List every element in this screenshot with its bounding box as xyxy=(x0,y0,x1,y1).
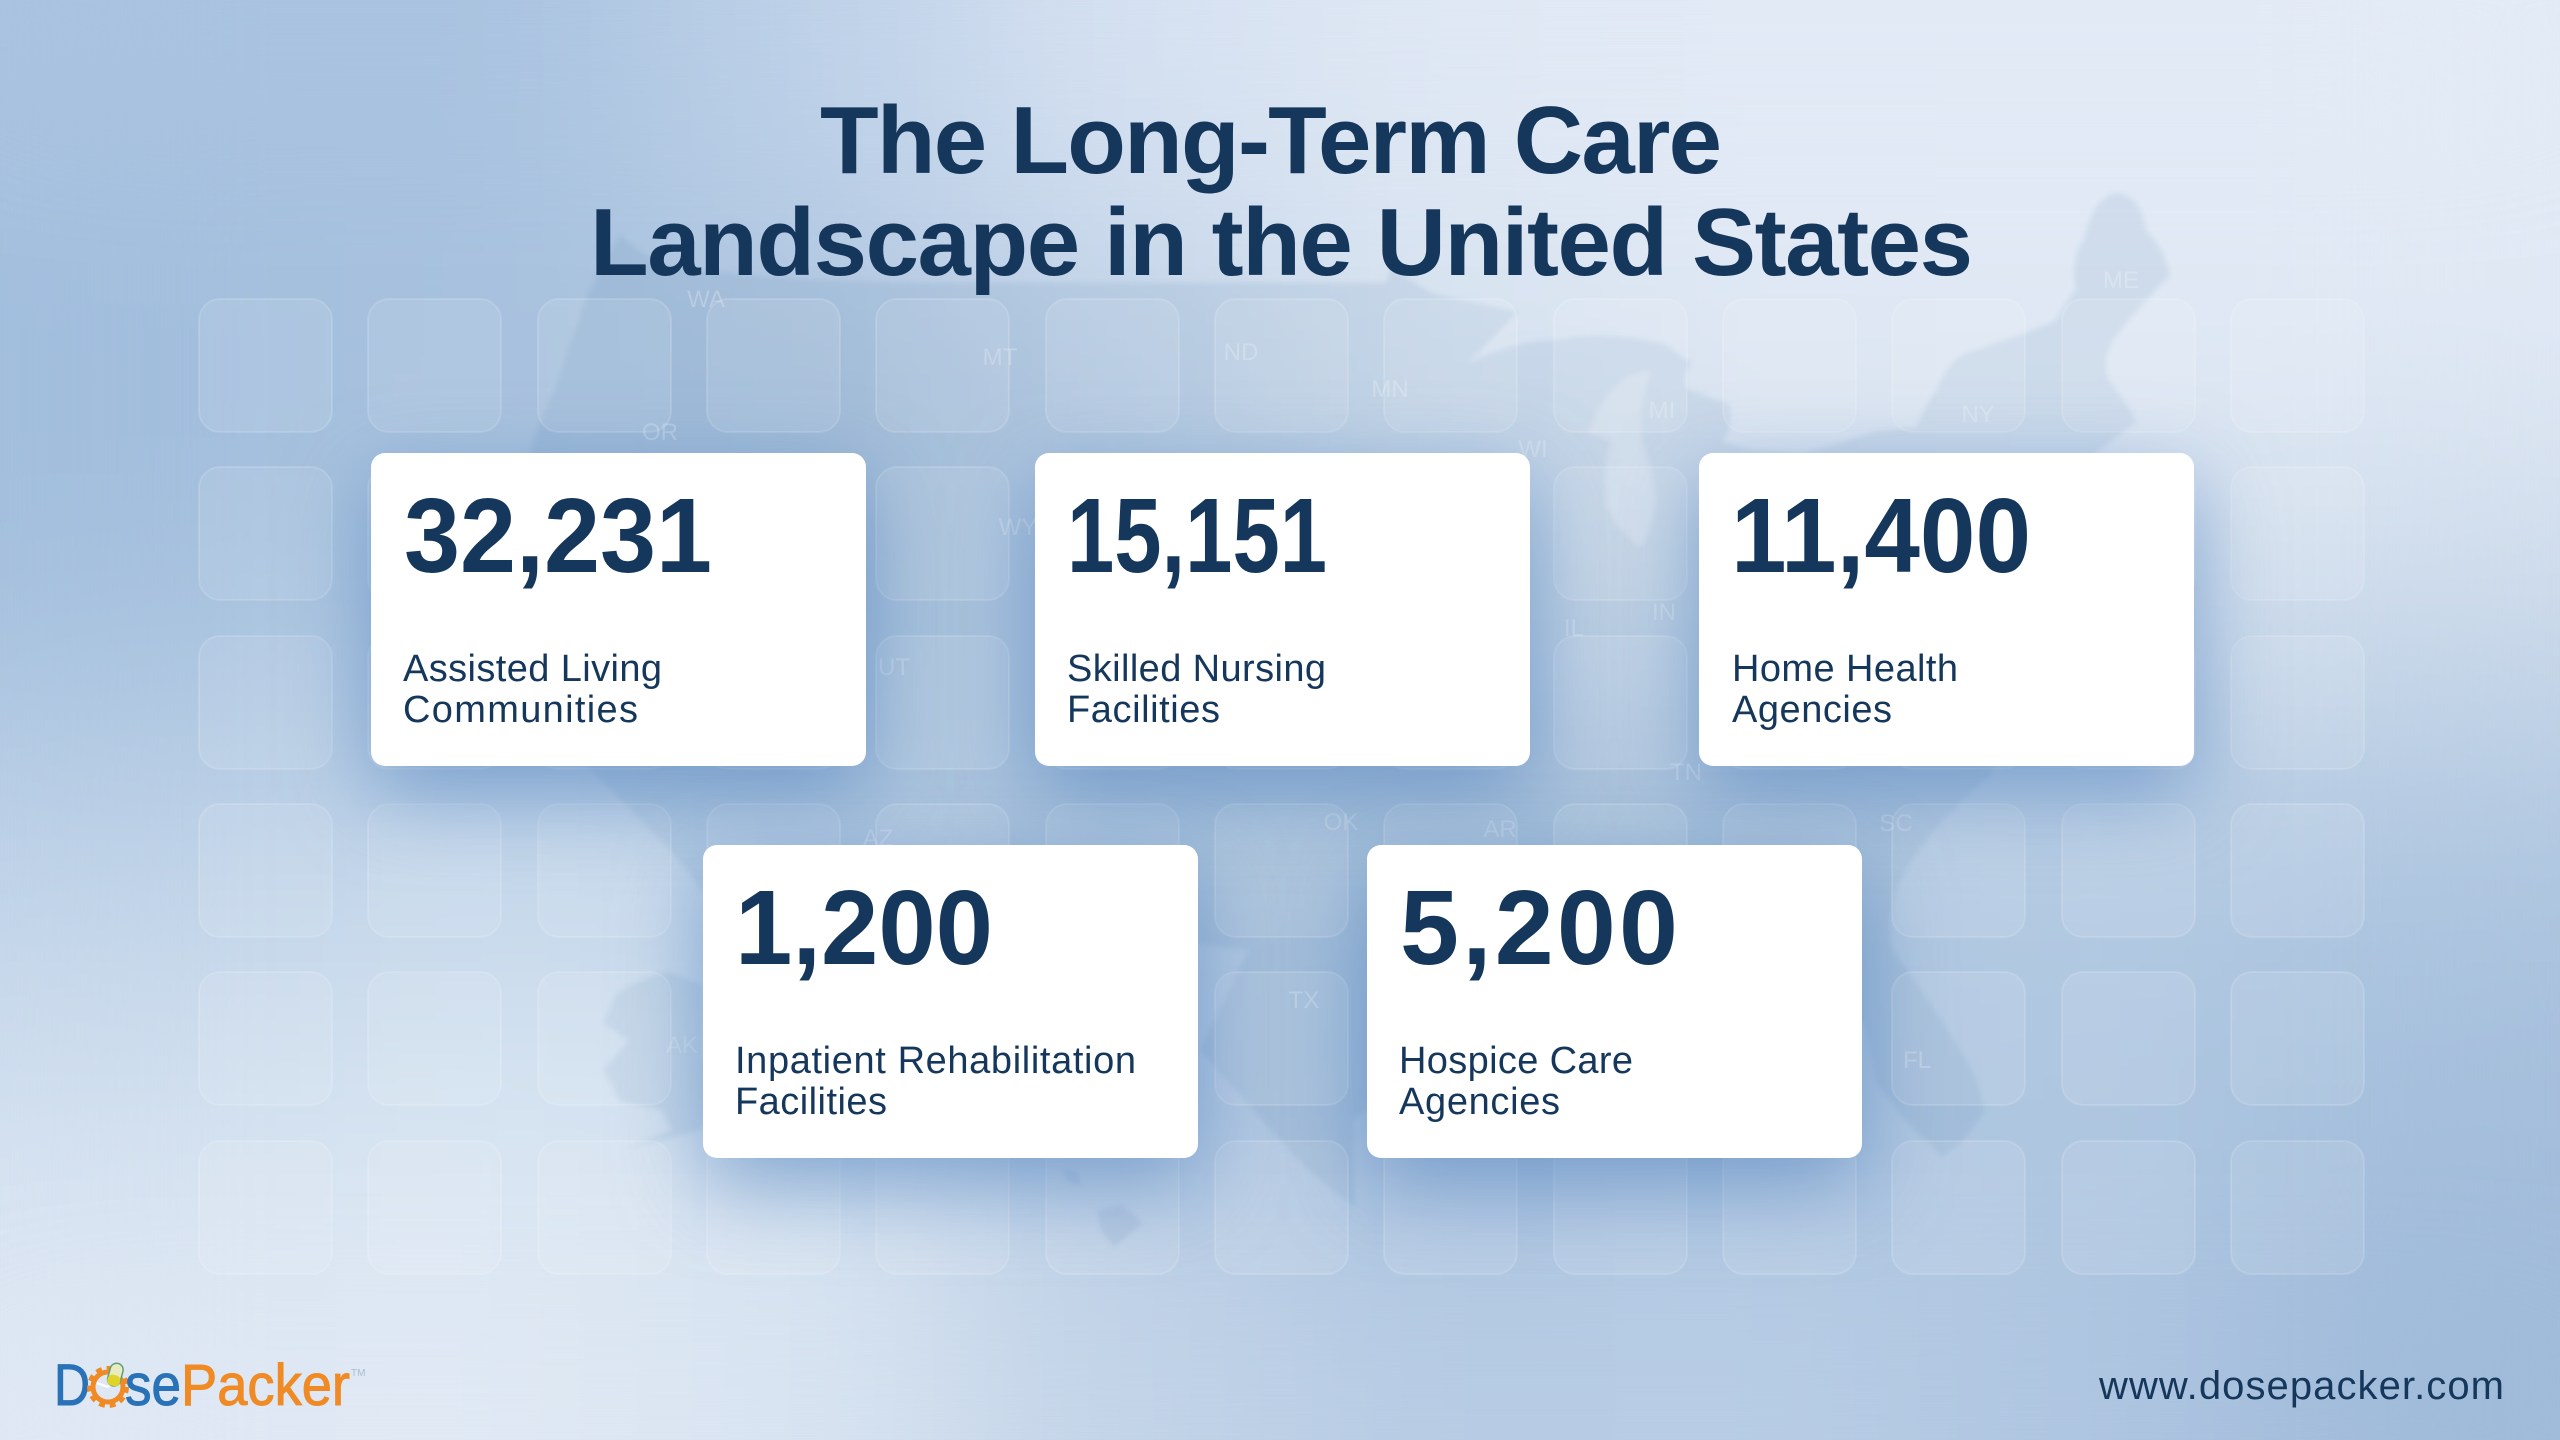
card: skilled nursing facilities: Facilities xyxy=(1067,689,1220,731)
card: home health agencies: Agencies xyxy=(1732,689,1892,731)
map: state abbreviations: ME xyxy=(2103,267,2139,294)
card: hospice care agencies: Hospice Care xyxy=(1399,1040,1633,1082)
icon: orange gear with capsule xyxy=(89,1362,127,1406)
card: inpatient rehabilitation facilities xyxy=(703,845,1198,1158)
map: state abbreviations: WA xyxy=(687,286,725,313)
map: state abbreviations: WI xyxy=(1518,436,1548,463)
map: state abbreviations: IN xyxy=(1652,599,1676,626)
background tile grid xyxy=(199,299,2364,1274)
map: Lake Michigan xyxy=(1590,372,1655,546)
map: state abbreviations: TN xyxy=(1670,759,1702,786)
map: state abbreviations: ND xyxy=(1224,339,1258,366)
map: state abbreviations: OR xyxy=(642,419,678,446)
map: state abbreviations: UT xyxy=(878,654,910,681)
map: state abbreviations: SC xyxy=(1879,810,1913,837)
logo: DosePacker xyxy=(54,1353,365,1418)
card: hospice care agencies: 5,200 xyxy=(1400,869,1678,987)
card: inpatient rehabilitation facilities: Facilities xyxy=(735,1081,887,1123)
map: state abbreviations: AZ xyxy=(863,825,893,852)
card: assisted living communities: 32,231 xyxy=(404,477,712,595)
logo: DosePacker: se xyxy=(125,1353,181,1418)
card: skilled nursing facilities: 15,151 xyxy=(1067,477,1327,595)
card: skilled nursing facilities: Skilled Nursing xyxy=(1067,648,1326,690)
map: state abbreviations: MN xyxy=(1371,376,1409,403)
card: skilled nursing facilities xyxy=(1035,453,1530,766)
logo: DosePacker: D xyxy=(54,1353,90,1418)
map: state abbreviations: AK xyxy=(666,1032,698,1059)
map: state abbreviations: AR xyxy=(1483,816,1517,843)
title: The Long-Term Care xyxy=(820,87,1722,194)
map: state abbreviations: OK xyxy=(1324,809,1358,836)
website url: www.dosepacker.com xyxy=(2098,1364,2504,1408)
card: assisted living communities xyxy=(371,453,866,766)
map: Hawaii xyxy=(1062,1168,1143,1247)
US map silhouette xyxy=(520,193,2170,1247)
card: home health agencies xyxy=(1699,453,2194,766)
card: home health agencies: Home Health xyxy=(1732,648,1958,690)
map: state abbreviations: FL xyxy=(1903,1047,1931,1074)
map: state abbreviations: TX xyxy=(1289,987,1319,1014)
card: hospice care agencies xyxy=(1367,845,1862,1158)
card: inpatient rehabilitation facilities: 1,200 xyxy=(735,869,993,987)
map: state abbreviations xyxy=(642,267,2139,1074)
map: state abbreviations: IL xyxy=(1564,615,1584,642)
card: inpatient rehabilitation facilities: Inpatient Rehabilitation xyxy=(735,1040,1136,1082)
card: hospice care agencies: Agencies xyxy=(1399,1081,1560,1123)
card: assisted living communities: Communities xyxy=(403,689,638,731)
map: state abbreviations: WY xyxy=(999,514,1037,541)
map: state abbreviations: MI xyxy=(1649,397,1675,424)
logo: DosePacker: Packer xyxy=(181,1353,350,1418)
card: home health agencies: 11,400 xyxy=(1731,477,2031,595)
map: state abbreviations: MT xyxy=(983,344,1018,371)
title xyxy=(590,87,1973,296)
title: Landscape in the United States xyxy=(590,189,1973,296)
map: state abbreviations: NY xyxy=(1961,401,1995,428)
logo: DosePacker: TM xyxy=(351,1368,365,1379)
map: Alaska xyxy=(563,972,740,1161)
card: assisted living communities: Assisted Living xyxy=(403,648,662,690)
